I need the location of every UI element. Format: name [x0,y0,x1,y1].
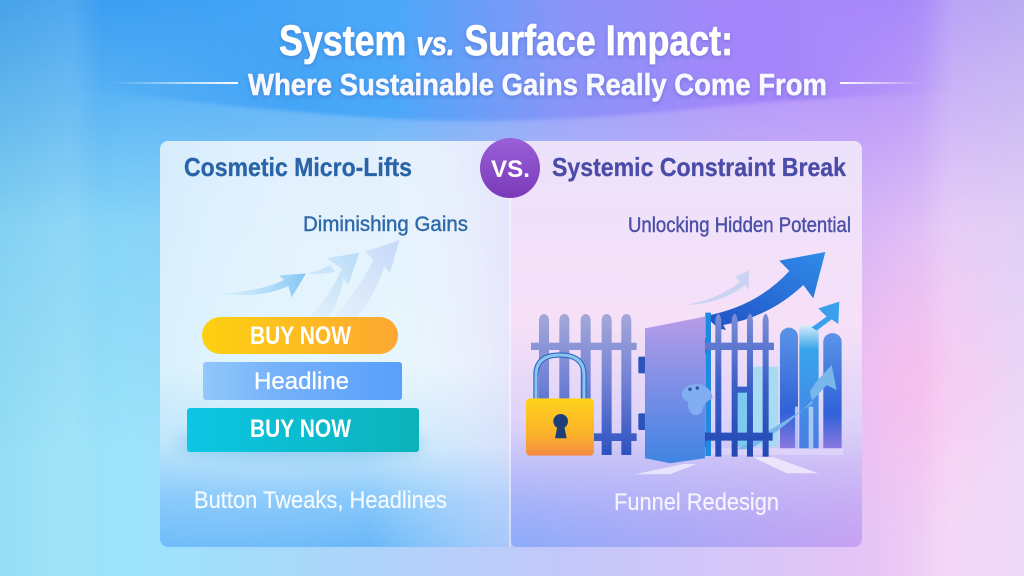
shadow under buttons [175,431,425,459]
illustration: broken fence and growth [526,252,843,474]
broken latch [682,384,713,415]
button: yellow buy now: BUY NOW [250,322,351,350]
left fence [531,314,637,455]
panel: systemic constraint break [510,141,862,547]
faint arrow [687,271,749,305]
icon: diminishing arrows [218,240,399,317]
divider [510,196,511,547]
caption: button tweaks: Button Tweaks, Headlines [194,487,447,514]
rule: left [112,82,238,84]
heading: cosmetic micro-lifts: Cosmetic Micro-Lifts [184,152,412,182]
ground light rays [635,448,843,474]
chart bars [737,325,842,448]
button: teal buy now: BUY NOW [250,415,351,443]
heading: systemic constraint break: Systemic Constraint Break [552,152,846,182]
caption: funnel redesign: Funnel Redesign [614,489,779,516]
rule: right [840,82,922,84]
title [112,17,922,102]
small arrow [812,302,839,331]
label: unlocking hidden potential: Unlocking Hidden Potential [628,214,851,237]
hinges [638,338,708,447]
heading: line two: Where Sustainable Gains Really Come From [248,67,827,102]
label: diminishing gains: Diminishing Gains [303,213,468,236]
big growth arrow [705,252,825,330]
padlock [526,355,594,456]
open gate door [645,317,705,463]
button: yellow buy now [202,317,398,354]
panel: cosmetic micro-lifts [160,141,510,547]
heading: line one: System vs. Surface Impact: [279,17,733,65]
button: headline: Headline [254,368,349,395]
button: teal buy now [187,408,419,452]
right fence [705,313,774,457]
panel: comparison card [160,138,862,547]
button: headline [203,362,402,400]
vs badge [480,138,540,198]
blue post [705,313,711,456]
rising arrow [737,365,837,449]
header band [135,17,893,122]
vs badge: VS. [491,156,530,183]
